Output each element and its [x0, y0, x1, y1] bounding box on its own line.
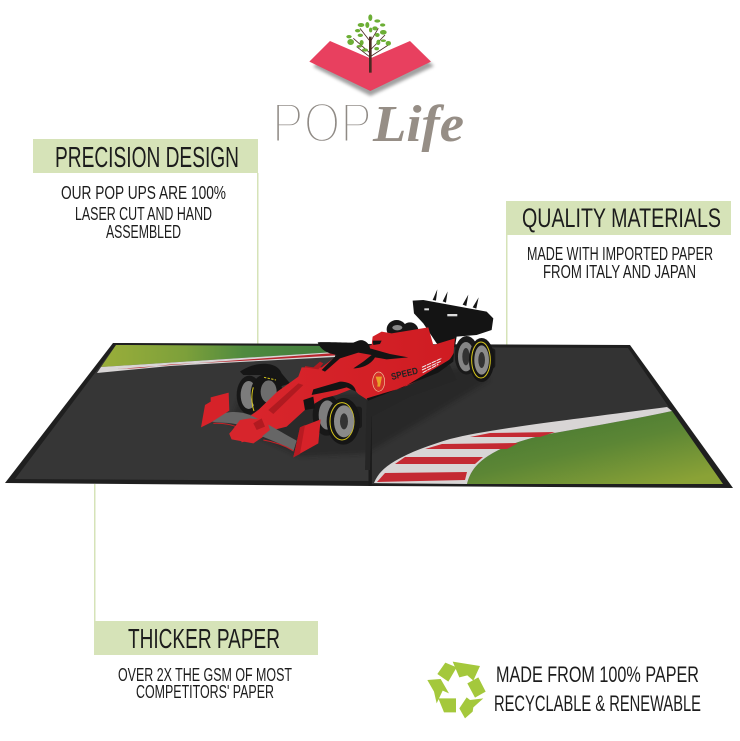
far rear wheels — [387, 320, 419, 341]
front wing — [201, 393, 321, 457]
text block: recyclable note — [494, 662, 701, 716]
heading background — [506, 201, 731, 235]
logo wordmark: POP: POP — [272, 91, 372, 155]
icon: red open book with tree — [309, 14, 434, 96]
heading: PRECISION DESIGN — [55, 142, 239, 174]
logo: Pop Life — [272, 14, 464, 155]
card fold — [368, 400, 372, 486]
far front wheels — [237, 364, 290, 414]
text block — [61, 183, 226, 242]
halo and cockpit — [303, 340, 454, 410]
car shadow — [230, 367, 490, 457]
right curb — [374, 407, 672, 484]
near front wheels — [313, 394, 362, 445]
panel: precision design — [33, 139, 258, 242]
text block: ASSEMBLED — [106, 222, 181, 242]
pop-up card: race track — [5, 343, 733, 488]
rear wheels — [455, 336, 495, 382]
text block: COMPETITORS' PAPER — [136, 682, 274, 702]
left curb — [97, 352, 335, 373]
rear wing — [413, 289, 493, 353]
card base — [5, 343, 733, 488]
illustration: red F1 car — [201, 289, 495, 470]
heading: THICKER PAPER — [128, 623, 280, 654]
text block: OUR POP UPS ARE 100% — [61, 183, 226, 203]
text block: LASER CUT AND HAND — [75, 204, 212, 224]
logo wordmark: Life: Life — [372, 96, 464, 153]
right grass — [467, 411, 723, 484]
car body — [229, 327, 455, 443]
heading background — [33, 139, 258, 173]
white side stripes — [422, 358, 442, 373]
panel: quality materials — [506, 201, 731, 282]
heading background — [94, 621, 318, 655]
text block — [118, 665, 292, 702]
car stand — [365, 365, 457, 470]
panel: thicker paper — [94, 621, 318, 702]
right asphalt — [372, 347, 722, 484]
connector lines — [94, 173, 508, 621]
side badge — [373, 372, 385, 391]
icon: recycle symbol — [427, 662, 486, 718]
left asphalt — [15, 345, 369, 481]
text block — [527, 244, 713, 282]
nose details — [253, 362, 323, 430]
left grass — [101, 345, 340, 367]
text block: OVER 2X THE GSM OF MOST — [118, 665, 292, 685]
sponsor text: SPEED — [390, 366, 419, 382]
